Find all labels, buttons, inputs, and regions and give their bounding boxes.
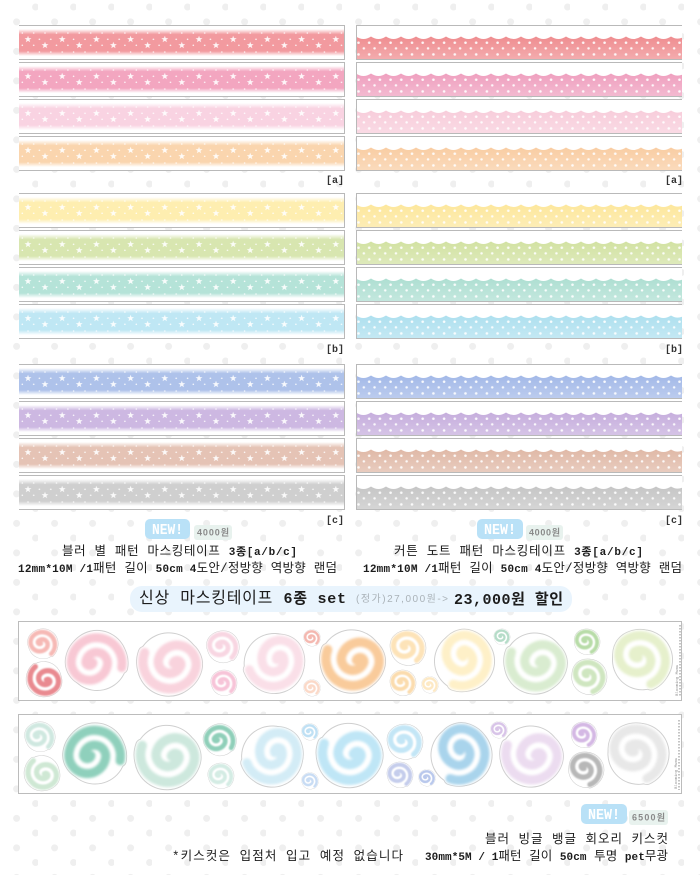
star tape c3 beige bbox=[19, 438, 345, 473]
sticker spiral 3 bbox=[62, 625, 132, 696]
label c: [c] bbox=[326, 515, 344, 527]
sticker spiral 2 bbox=[18, 654, 69, 705]
label b: [b] bbox=[326, 344, 344, 356]
panel: kiss-cut sticker strip warm colours bbox=[18, 619, 683, 706]
kiss-cut product caption bbox=[172, 804, 668, 864]
banner title: 신상 마스킹테이프 6종 set bbox=[139, 589, 346, 608]
dot tape c3 beige bbox=[356, 438, 682, 473]
sticker spiral 7 bbox=[235, 624, 313, 703]
new badge: NEW! bbox=[484, 522, 516, 539]
dot tape b1 yellow bbox=[356, 193, 682, 228]
dot tape b2 green bbox=[356, 230, 682, 265]
star tape a4 peach bbox=[19, 136, 345, 171]
left product caption bbox=[18, 519, 337, 576]
star tape b2 green bbox=[19, 230, 345, 265]
sticker spiral 6 bbox=[206, 664, 243, 701]
sticker spiral 19 bbox=[597, 712, 680, 795]
panel: curtain dot tape swatches bbox=[356, 25, 683, 527]
price badge bbox=[526, 525, 563, 540]
sticker spiral 18 bbox=[566, 654, 612, 700]
sticker spiral 5 bbox=[198, 717, 242, 762]
sticker spiral 14 bbox=[422, 715, 501, 795]
right product caption bbox=[363, 519, 682, 576]
dot tape a2 pink bbox=[356, 62, 682, 97]
sticker spiral 10 bbox=[311, 620, 393, 703]
sticker spiral 12 bbox=[382, 756, 419, 793]
dot tape c1 blue bbox=[356, 364, 682, 399]
label c: [c] bbox=[665, 515, 683, 527]
star tape a3 light pink bbox=[19, 99, 345, 134]
dot tape a4 peach bbox=[356, 136, 682, 171]
sticker spiral 14 bbox=[425, 622, 504, 700]
dot tape a1 red bbox=[356, 25, 682, 60]
panel: blur star tape swatches bbox=[19, 25, 345, 527]
dot tape c2 purple bbox=[356, 401, 682, 436]
price badge: 6500원 bbox=[632, 812, 665, 822]
star tape c4 gray bbox=[19, 475, 345, 510]
price badge: 4000원 bbox=[529, 526, 560, 538]
sticker spiral 15 bbox=[491, 625, 514, 648]
sticker spiral 15 bbox=[487, 718, 511, 742]
title line: 블러 빙글 뱅글 회오리 키스컷 bbox=[485, 832, 668, 847]
new badge bbox=[477, 519, 523, 539]
price badge: 4000원 bbox=[197, 526, 229, 538]
new badge bbox=[145, 519, 190, 539]
label a: [a] bbox=[326, 175, 344, 187]
sheet brand mark: Blooming Mumu bbox=[674, 757, 679, 789]
sticker spiral 16 bbox=[491, 717, 571, 796]
sticker spiral 1 bbox=[19, 715, 62, 758]
sticker spiral 17 bbox=[566, 717, 602, 753]
new badge: NEW! bbox=[152, 522, 183, 539]
dot tape a3 light pink bbox=[356, 99, 682, 134]
sticker spiral 8 bbox=[300, 626, 324, 650]
sticker spiral 8 bbox=[298, 720, 322, 744]
sticker spiral 10 bbox=[307, 714, 391, 797]
star tape b1 yellow bbox=[19, 193, 345, 228]
star tape a2 pink bbox=[19, 62, 345, 97]
star tape b4 sky bbox=[19, 304, 345, 339]
label a: [a] bbox=[665, 175, 683, 187]
notice line: *키스컷은 입점처 입고 예정 없습니다 bbox=[172, 849, 403, 864]
sheet brand mark: Blooming Mumu bbox=[675, 664, 680, 696]
new badge bbox=[581, 804, 627, 824]
dot tape b3 mint bbox=[356, 267, 682, 302]
new badge: NEW! bbox=[588, 807, 620, 824]
title line: 블러 별 패턴 마스킹테이프 3종[a/b/c] bbox=[62, 544, 297, 559]
sticker spiral 4 bbox=[128, 623, 210, 706]
sticker spiral 7 bbox=[232, 717, 312, 796]
star tape c1 blue bbox=[19, 364, 345, 399]
sticker spiral 12 bbox=[385, 664, 422, 701]
set price banner bbox=[130, 586, 572, 612]
spec line: 12mm*10M /1패턴 길이 50cm 4도안/정방향 역방향 랜덤 bbox=[18, 561, 337, 576]
sticker spiral 13 bbox=[418, 673, 442, 697]
sticker spiral 4 bbox=[125, 716, 209, 799]
sticker spiral 11 bbox=[380, 716, 431, 767]
spec line: 12mm*10M /1패턴 길이 50cm 4도안/정방향 역방향 랜덤 bbox=[363, 561, 682, 576]
sticker spiral 5 bbox=[200, 624, 246, 670]
sticker spiral 9 bbox=[298, 769, 322, 793]
sticker spiral 11 bbox=[383, 622, 434, 673]
sticker spiral 19 bbox=[602, 619, 683, 700]
price badge bbox=[629, 810, 668, 825]
dot tape c4 gray bbox=[356, 475, 682, 510]
regular price: (정가)27,000원-> bbox=[356, 593, 448, 605]
sticker spiral 13 bbox=[415, 766, 439, 790]
sticker spiral 3 bbox=[59, 717, 131, 789]
sticker spiral 17 bbox=[569, 624, 605, 660]
spec line: 30mm*5M / 1패턴 길이 50cm 투명 pet무광 bbox=[425, 849, 668, 864]
sticker spiral 2 bbox=[16, 748, 67, 799]
title line: 커튼 도트 패턴 마스킹테이프 3종[a/b/c] bbox=[394, 544, 643, 559]
price badge bbox=[194, 525, 232, 540]
star tape a1 red bbox=[19, 25, 345, 60]
sticker spiral 1 bbox=[22, 622, 65, 665]
sticker spiral 18 bbox=[563, 747, 609, 793]
sticker spiral 16 bbox=[495, 624, 575, 703]
panel: kiss-cut sticker strip cool colours bbox=[16, 712, 681, 799]
sticker spiral 9 bbox=[300, 676, 324, 700]
label b: [b] bbox=[665, 344, 683, 356]
star tape c2 purple bbox=[19, 401, 345, 436]
sticker spiral 6 bbox=[203, 757, 240, 794]
sale price: 23,000원 할인 bbox=[454, 591, 563, 609]
dot tape b4 sky bbox=[356, 304, 682, 339]
star tape b3 mint bbox=[19, 267, 345, 302]
